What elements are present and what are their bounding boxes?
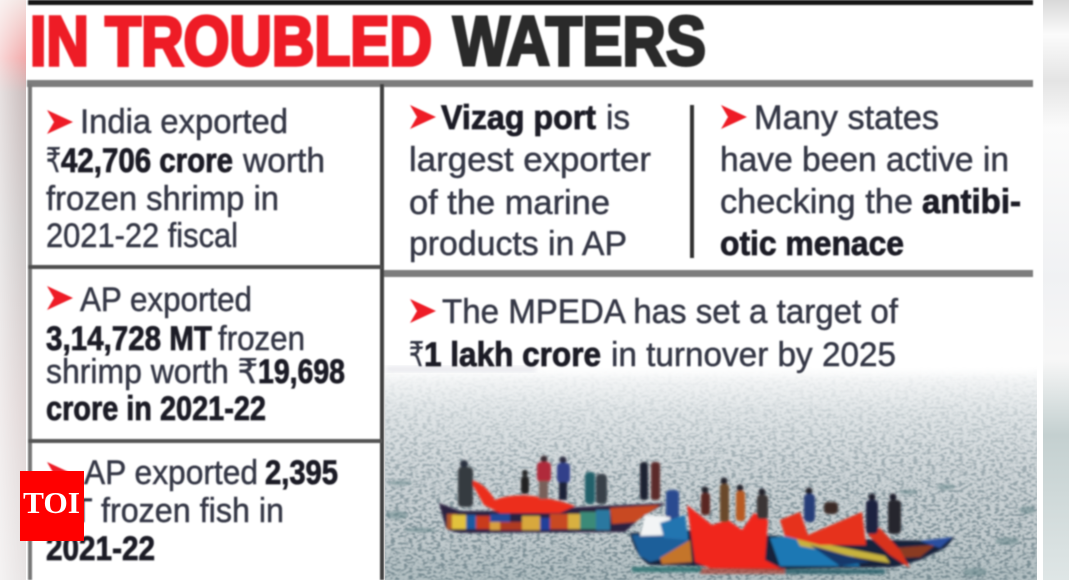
title: WATERS	[453, 2, 706, 80]
panel: India frozen shrimp exports: worth	[242, 142, 325, 180]
panel: India frozen shrimp exports: 42,706 crore	[61, 142, 233, 180]
white fade behind bottom-panel text	[385, 300, 1037, 370]
boats right	[630, 505, 955, 574]
panel: antibiotic menace: antibi-	[922, 183, 1021, 221]
icon: red arrow bullet	[410, 105, 436, 129]
panel: Vizag port: Vizag port	[441, 99, 596, 137]
panel: AP frozen shrimp exports: 19,698	[258, 353, 345, 391]
panel: AP frozen fish exports: 2021-22	[46, 530, 155, 568]
grey smudge under text	[386, 366, 536, 372]
panel: antibiotic menace: checking the	[720, 183, 913, 221]
panel: AP frozen shrimp exports: shrimp worth ₹	[46, 353, 258, 391]
fishermen on left boat	[458, 456, 679, 522]
TOI logo badge: TOI	[23, 485, 80, 520]
icon: red arrow bullet	[47, 110, 73, 134]
panel: AP frozen shrimp exports: AP exported	[80, 281, 252, 319]
fishermen on right boats	[701, 478, 901, 534]
panel: antibiotic menace: Many states	[754, 99, 939, 137]
panel: AP frozen shrimp exports: crore in 2021-22	[46, 390, 266, 428]
photo: fishing boats at sea	[385, 366, 1037, 580]
panel: Vizag port: of the marine	[409, 184, 610, 222]
title: IN TROUBLED	[30, 2, 432, 80]
panel: antibiotic menace: otic menace	[720, 225, 904, 263]
panel: India frozen shrimp exports: India exported	[80, 103, 288, 141]
panel: AP frozen fish exports: 2,395	[265, 454, 338, 492]
blurred left margin background	[0, 0, 26, 580]
panel: India frozen shrimp exports	[46, 103, 325, 255]
icon: red arrow bullet	[721, 105, 747, 129]
panel: MPEDA target: The MPEDA has set a target of	[442, 293, 899, 331]
panel: AP frozen shrimp exports	[46, 281, 345, 428]
panel: India frozen shrimp exports: 2021-22 fiscal	[46, 217, 238, 255]
panel: Vizag port	[409, 99, 651, 263]
panel: India frozen shrimp exports: ₹	[46, 142, 61, 180]
panel: AP frozen fish exports: MT frozen fish in	[46, 492, 284, 530]
boat left	[439, 480, 666, 533]
panel: MPEDA target: 1 lakh crore	[424, 336, 601, 374]
panel: AP frozen shrimp exports: 3,14,728 MT	[46, 320, 212, 358]
panel: AP frozen fish exports	[46, 454, 338, 568]
dark water patches	[386, 480, 1035, 576]
TOI logo badge	[20, 471, 84, 541]
panel: Vizag port: products in AP	[409, 225, 627, 263]
panel: antibiotic menace: have been active in	[720, 141, 1009, 179]
panel: MPEDA target	[409, 293, 899, 374]
icon: red arrow bullet	[410, 299, 436, 323]
panel: India frozen shrimp exports: frozen shrimp in	[46, 180, 279, 218]
panel: AP frozen shrimp exports: frozen	[218, 320, 305, 358]
panel: Vizag port: is	[606, 99, 630, 137]
panel: Vizag port: largest exporter	[409, 141, 651, 179]
panel: AP frozen fish exports: AP exported	[84, 454, 258, 492]
icon: red arrow bullet	[47, 286, 73, 310]
panel: antibiotic menace	[720, 99, 1021, 263]
icon: red arrow bullet	[47, 462, 73, 486]
panel: MPEDA target: in turnover by 2025	[611, 336, 896, 374]
panel: MPEDA target: ₹	[409, 336, 424, 374]
blurred right margin background	[1043, 0, 1069, 580]
